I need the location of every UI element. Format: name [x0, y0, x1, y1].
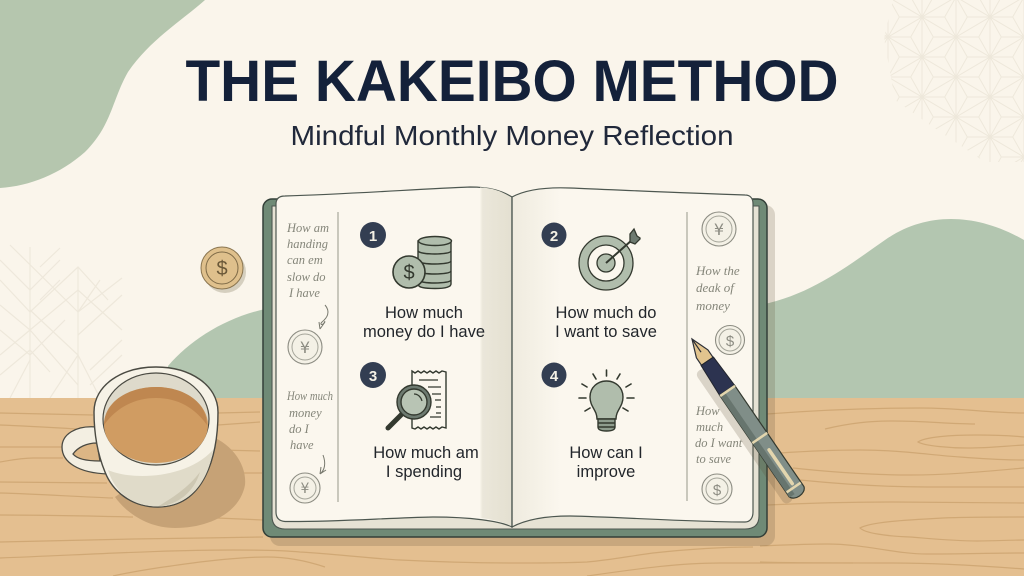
left gutter shade — [480, 188, 511, 526]
dollar coin right middle: $ — [726, 333, 735, 350]
badge 4: 4 — [550, 368, 559, 385]
handwritten note left top — [286, 221, 329, 300]
handwritten note left bottom: do I — [289, 422, 310, 436]
handwritten note left top: handing — [287, 237, 328, 251]
geometric pattern left — [0, 245, 122, 398]
handwritten note left bottom: money — [289, 406, 322, 420]
handwritten note left bottom — [286, 389, 333, 452]
green blob top left — [0, 0, 205, 188]
handwritten note left top: slow do — [287, 270, 326, 284]
pen bands — [720, 386, 801, 493]
handwritten note left bottom: How much — [286, 389, 333, 403]
book cover — [263, 199, 767, 537]
asanoha pattern top right — [880, 0, 1024, 165]
hand arrow left bottom — [320, 455, 326, 474]
coffee — [104, 387, 208, 463]
handwritten note right bottom: do I want — [695, 436, 743, 450]
green hill right — [760, 219, 1024, 400]
handwritten note right bottom: much — [696, 420, 723, 434]
book shadow — [270, 205, 775, 546]
margin rule right — [686, 212, 688, 501]
yen coin left top — [288, 330, 322, 364]
step 3 label — [373, 444, 479, 481]
step 4 label: improve — [577, 463, 635, 481]
icon: coin stack — [393, 236, 452, 288]
cup handle — [62, 427, 108, 474]
spine line — [511, 197, 513, 527]
pen shadow — [695, 367, 794, 505]
pen grip — [700, 356, 734, 395]
step 2 label: How much do — [556, 304, 656, 322]
handwritten note right bottom — [695, 404, 743, 466]
wood grain — [0, 408, 1024, 576]
pen nib — [686, 335, 713, 365]
notebook — [263, 187, 775, 546]
page stack — [272, 206, 759, 529]
step 2 label: I want to save — [555, 323, 657, 341]
badge 3: 3 — [369, 368, 377, 385]
handwritten note left bottom: have — [290, 438, 314, 452]
badge 2 — [542, 222, 566, 248]
step 3 label: How much am — [373, 444, 479, 462]
badge 3 — [360, 362, 386, 388]
icon: coin stack: $ — [403, 262, 415, 284]
dollar coin right bottom: $ — [713, 482, 722, 499]
cup shadow — [115, 434, 245, 528]
cup inside — [103, 373, 209, 465]
coin on desk: $ — [216, 258, 228, 280]
green hill left — [168, 309, 265, 400]
badge 1: 1 — [369, 228, 377, 245]
step 1 label — [363, 304, 485, 341]
step 3 label: I spending — [386, 463, 462, 481]
pen barrel — [720, 385, 807, 501]
fountain pen — [678, 334, 807, 506]
handwritten note right top: deak of — [696, 280, 736, 295]
dollar coin right middle — [716, 326, 744, 354]
dollar coin right bottom — [702, 474, 732, 504]
handwritten note left top: I have — [288, 286, 320, 300]
yen coin left top: ¥ — [300, 338, 310, 357]
step 2 label — [555, 304, 657, 341]
icon: receipt and magnifier — [388, 371, 446, 429]
icon: light bulb — [579, 370, 634, 431]
wooden table — [0, 398, 1024, 576]
right page — [512, 188, 753, 527]
handwritten note left top: can em — [287, 253, 323, 267]
coin on desk — [201, 247, 246, 293]
icon: target with dart — [579, 229, 640, 290]
subtitle: Mindful Monthly Money Reflection — [290, 120, 734, 151]
title: THE KAKEIBO METHOD — [186, 49, 838, 114]
handwritten note right top: money — [696, 298, 730, 313]
cup body — [94, 367, 218, 507]
coffee cup — [62, 367, 245, 528]
pen clip — [769, 450, 792, 484]
handwritten note right top — [695, 263, 740, 313]
step 4 label — [569, 444, 643, 481]
yen coin right top: ¥ — [714, 220, 724, 239]
badge 1 — [360, 222, 386, 248]
step 1 label: money do I have — [363, 323, 485, 341]
hand arrow left top — [319, 305, 328, 329]
yen coin right top — [702, 212, 736, 246]
left page — [276, 187, 512, 527]
badge 2: 2 — [550, 228, 558, 245]
step 4 label: How can I — [569, 444, 643, 462]
step 1 label: How much — [385, 304, 463, 322]
handwritten note right top: How the — [695, 263, 740, 278]
handwritten note right bottom: to save — [696, 452, 732, 466]
yen coin left bottom: ¥ — [301, 481, 310, 497]
yen coin left bottom — [290, 473, 320, 503]
badge 4 — [542, 362, 566, 388]
handwritten note right bottom: How — [695, 404, 720, 418]
handwritten note left top: How am — [286, 221, 329, 235]
margin rule left — [337, 212, 339, 502]
